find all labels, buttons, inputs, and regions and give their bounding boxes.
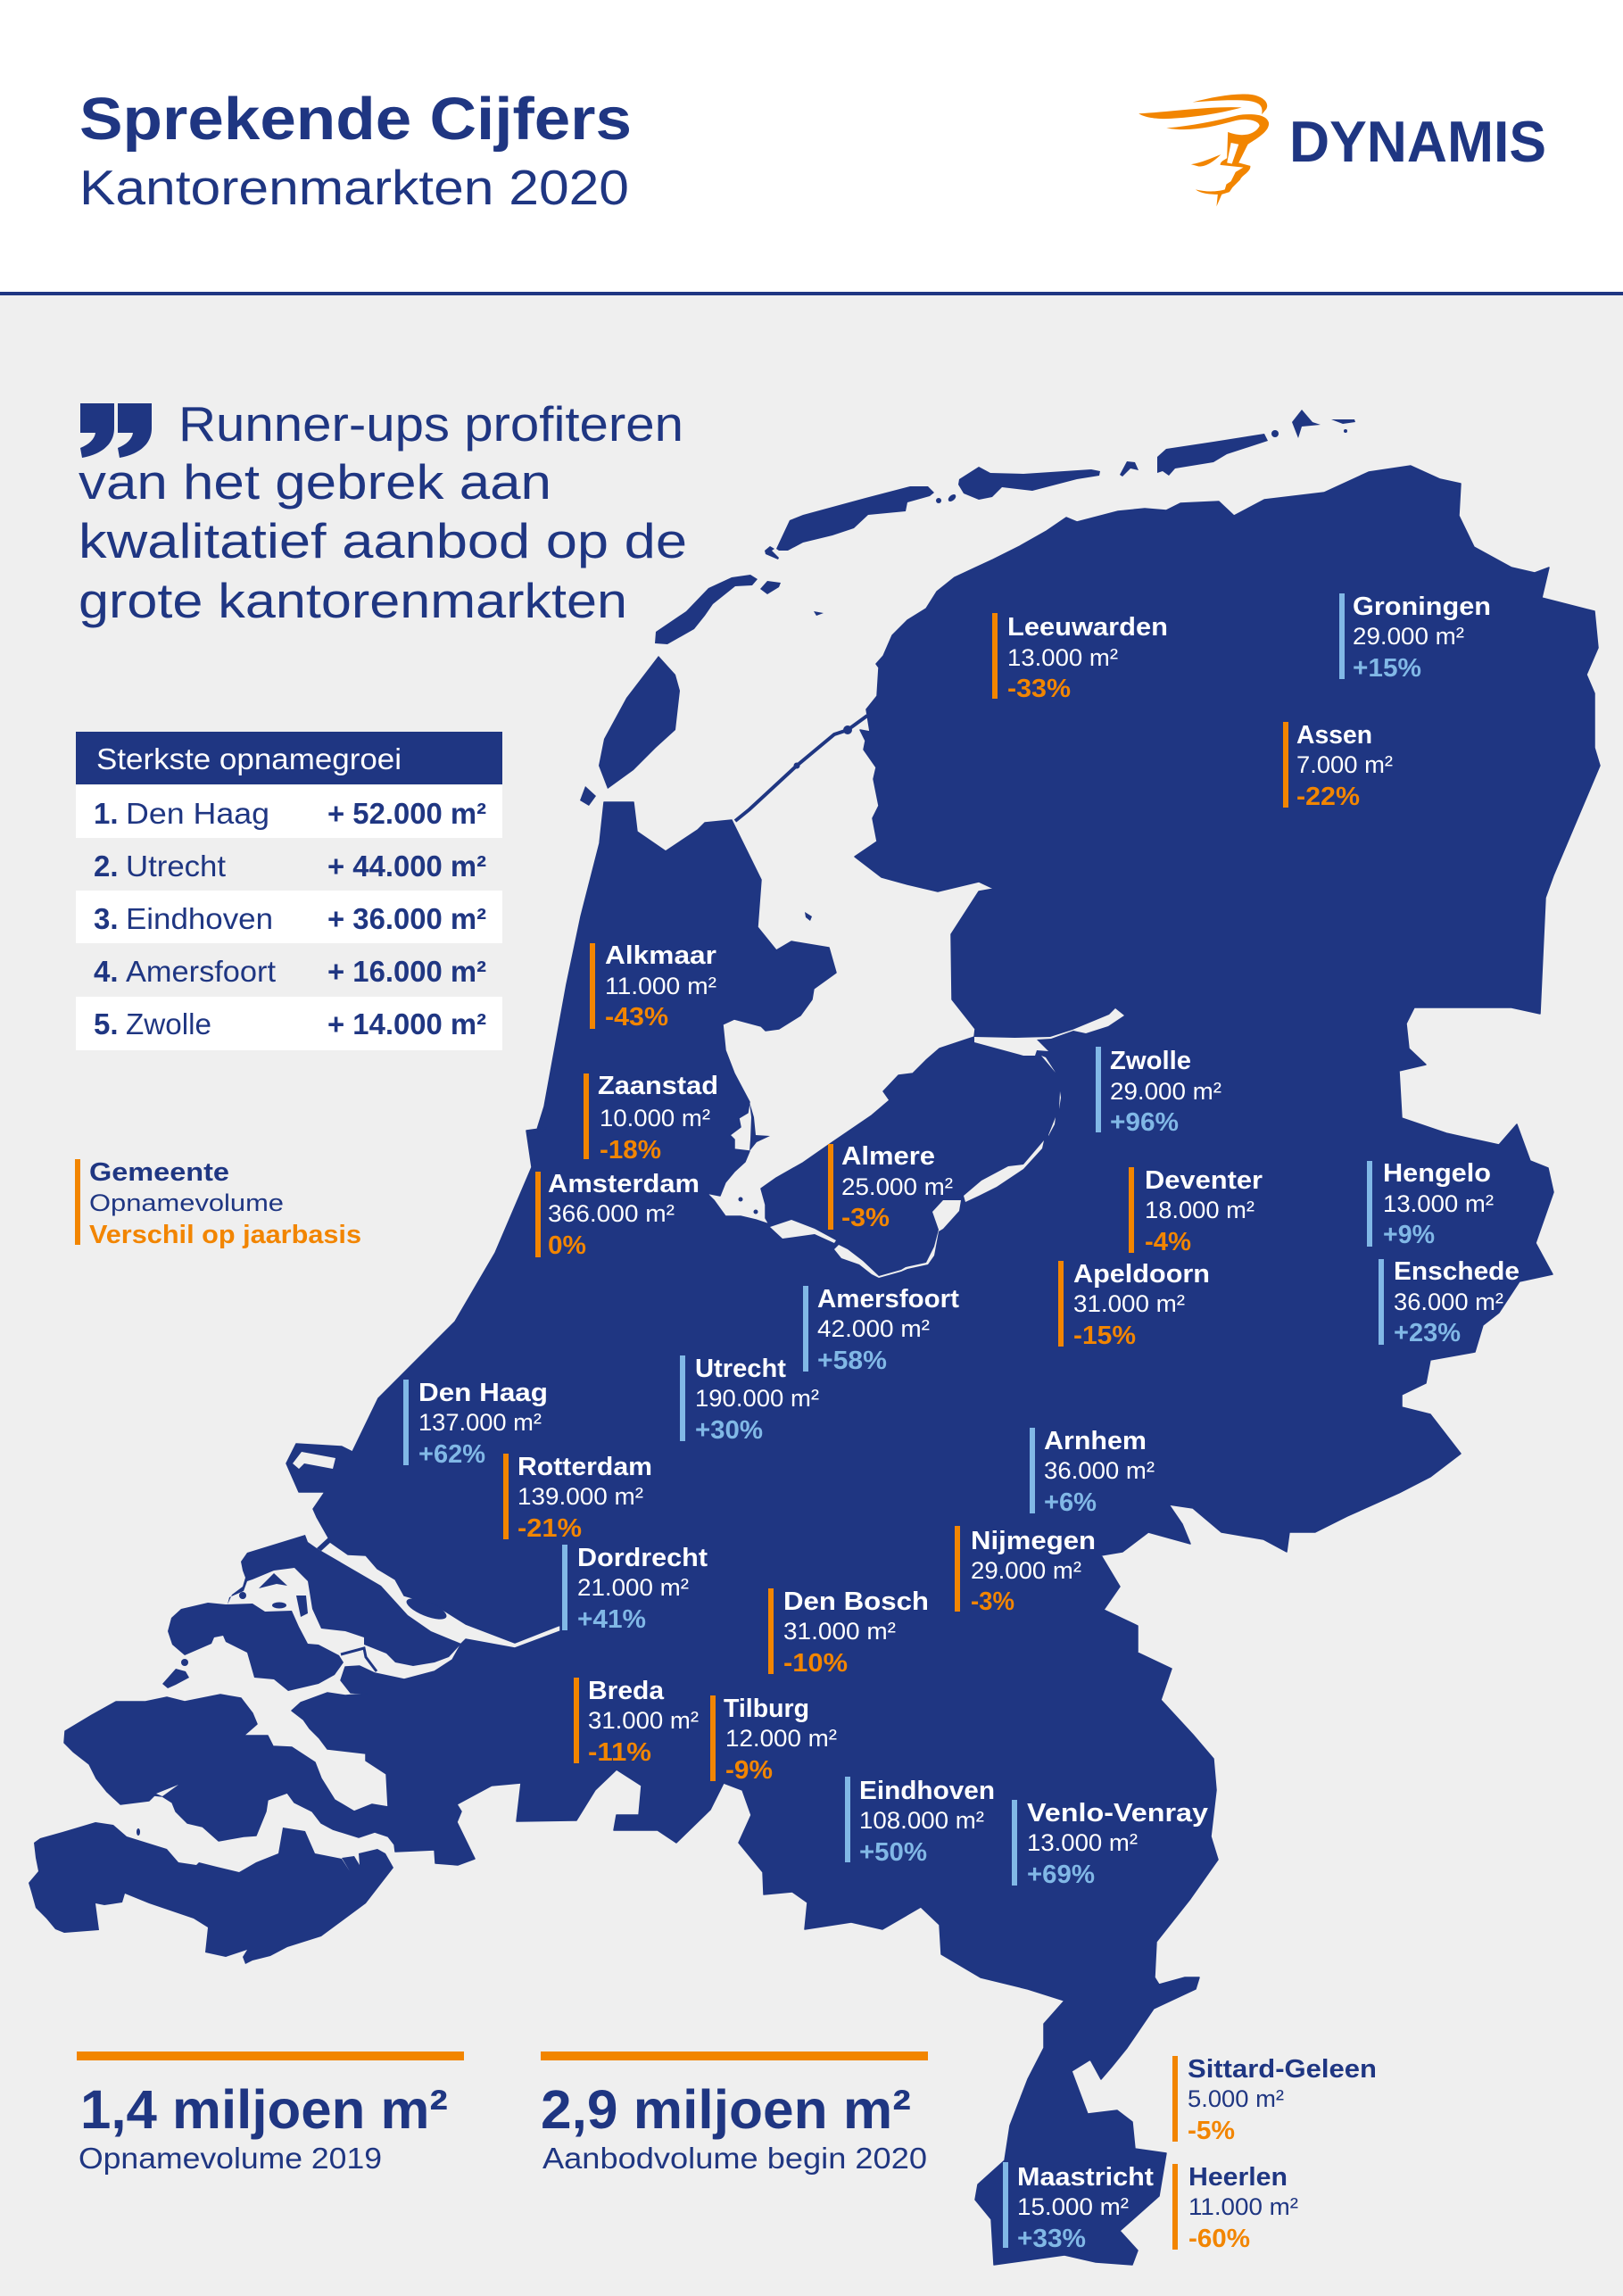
title: [79, 86, 632, 215]
label: Breda: Breda: [588, 1677, 665, 1705]
row 1: + 52.000 m²: [327, 797, 486, 830]
label: Sittard-Geleen: [1172, 2055, 1377, 2145]
label: Den Bosch: [768, 1587, 929, 1678]
label: Breda: -11%: [588, 1738, 651, 1767]
row 4: Amersfoort: [126, 955, 276, 988]
label: Den Haag: +62%: [418, 1440, 485, 1469]
row 1: Den Haag: [126, 797, 269, 830]
row 2: Utrecht: [126, 850, 226, 883]
label: Den Haag: Den Haag: [418, 1379, 548, 1407]
label: Sittard-Geleen: 5.000 m²: [1188, 2085, 1284, 2112]
label: Almere: 25.000 m²: [841, 1173, 953, 1200]
row 1: 1.: [94, 797, 119, 830]
label: Venlo-Venray: Venlo-Venray: [1027, 1799, 1208, 1828]
row 3: 3.: [94, 902, 119, 935]
label: Assen: Assen: [1296, 721, 1372, 750]
row 2: [76, 838, 502, 891]
quote text: Runner-ups profiteren: [178, 396, 683, 452]
label: Nijmegen: 29.000 m²: [971, 1557, 1081, 1584]
label: Heerlen: -60%: [1188, 2225, 1250, 2253]
label: Hengelo: Hengelo: [1383, 1159, 1491, 1188]
label: Zaanstad: -18%: [600, 1136, 661, 1165]
table: sterkste opnamegroei: [76, 732, 502, 1050]
water: inlet on Zuid-Beveland: [156, 1785, 178, 1796]
legend: [75, 1158, 361, 1249]
mainland: [64, 466, 1600, 2265]
label: Rotterdam: [503, 1453, 652, 1543]
Zuid-Holland and Zeeland islands: [29, 1535, 461, 1964]
label: Amsterdam: 0%: [548, 1231, 586, 1260]
label: Arnhem: [1030, 1427, 1155, 1517]
label: Apeldoorn: -15%: [1073, 1322, 1136, 1350]
label: Heerlen: 11.000 m²: [1188, 2193, 1298, 2220]
label: Tilburg: Tilburg: [724, 1695, 809, 1723]
label: Deventer: 18.000 m²: [1145, 1197, 1255, 1223]
stat: opnamevolume 2019: [77, 2051, 464, 2175]
row 4: 4.: [94, 955, 119, 988]
Afsluitdijk: [735, 716, 867, 821]
water: Ketelmeer: [974, 1008, 1124, 1056]
label: Heerlen: [1172, 2163, 1298, 2253]
row 2: 2.: [94, 850, 119, 883]
label: Maastricht: +33%: [1017, 2225, 1086, 2253]
water: Europoort harbour: [293, 1452, 335, 1469]
label: Venlo-Venray: [1012, 1799, 1208, 1889]
label: Nijmegen: [955, 1526, 1096, 1616]
label: Enschede: [1379, 1257, 1519, 1347]
row 5: Zwolle: [126, 1007, 211, 1040]
label: Maastricht: [1003, 2162, 1154, 2253]
label: Groningen: [1339, 593, 1491, 683]
label: Arnhem: Arnhem: [1044, 1427, 1147, 1455]
row 4: + 16.000 m²: [327, 955, 486, 988]
row 3: Eindhoven: [126, 902, 273, 935]
row 5: 5.: [94, 1007, 119, 1040]
Wadden islands: [580, 410, 1355, 921]
label: Nijmegen: Nijmegen: [971, 1527, 1096, 1555]
logo: Dynamis: [1139, 94, 1546, 206]
header band: [0, 0, 1623, 295]
label: Deventer: -4%: [1145, 1228, 1191, 1256]
quote text: van het gebrek aan: [79, 454, 551, 510]
label: Zwolle: Zwolle: [1110, 1047, 1191, 1075]
label: Tilburg: -9%: [725, 1756, 773, 1785]
label: Den Haag: 137.000 m²: [418, 1409, 542, 1436]
label: Enschede: Enschede: [1394, 1257, 1519, 1286]
icon: Dynamis head: [1139, 94, 1269, 206]
row 5: + 14.000 m²: [327, 1007, 486, 1040]
icon: quotation marks: [80, 403, 152, 458]
label: Zaanstad: [584, 1072, 718, 1165]
label: Breda: [574, 1677, 699, 1767]
label: Dordrecht: +41%: [577, 1605, 646, 1634]
label: Hengelo: 13.000 m²: [1383, 1190, 1494, 1217]
title: Sprekende Cijfers: [79, 86, 632, 153]
row 3: [76, 891, 502, 943]
legend: Opnamevolume: [89, 1189, 284, 1216]
label: Rotterdam: Rotterdam: [518, 1453, 652, 1481]
label: Amersfoort: +58%: [817, 1347, 887, 1375]
label: Dordrecht: 21.000 m²: [577, 1574, 689, 1601]
label: Alkmaar: [590, 941, 716, 1032]
water: Randmeren around Flevoland: [770, 1056, 1061, 1278]
label: Leeuwarden: Leeuwarden: [1007, 613, 1168, 642]
label: Breda: 31.000 m²: [588, 1707, 699, 1734]
label: Groningen: +15%: [1353, 654, 1421, 683]
label: Den Haag: [403, 1379, 548, 1469]
label: Arnhem: +6%: [1044, 1488, 1097, 1517]
table header: Sterkste opnamegroei: [96, 742, 402, 775]
label: Leeuwarden: 13.000 m²: [1007, 644, 1118, 671]
label: Utrecht: Utrecht: [695, 1355, 786, 1383]
stat: opnamevolume 2019: Opnamevolume 2019: [79, 2142, 382, 2175]
label: Enschede: +23%: [1394, 1319, 1461, 1347]
stat: aanbodvolume begin 2020: 2,9 miljoen m²: [541, 2079, 911, 2140]
label: Den Bosch: Den Bosch: [783, 1587, 929, 1616]
label: Utrecht: 190.000 m²: [695, 1385, 819, 1412]
label: Leeuwarden: -33%: [1007, 675, 1071, 703]
label: Assen: 7.000 m²: [1296, 751, 1393, 778]
label: Enschede: 36.000 m²: [1394, 1289, 1503, 1315]
label: Amsterdam: 366.000 m²: [548, 1200, 675, 1227]
label: Venlo-Venray: +69%: [1027, 1861, 1095, 1889]
label: Rotterdam: 139.000 m²: [518, 1483, 643, 1510]
label: Almere: -3%: [841, 1204, 890, 1232]
quote text: [79, 396, 687, 628]
label: Deventer: [1129, 1166, 1263, 1256]
stat: opnamevolume 2019: 1,4 miljoen m²: [80, 2079, 448, 2140]
label: Venlo-Venray: 13.000 m²: [1027, 1829, 1138, 1856]
label: Amersfoort: Amersfoort: [817, 1285, 959, 1314]
label: Apeldoorn: Apeldoorn: [1073, 1260, 1210, 1289]
quote text: kwalitatief aanbod op de: [79, 513, 687, 568]
label: Utrecht: [680, 1355, 819, 1445]
stat: aanbodvolume begin 2020: Aanbodvolume begin 2020: [542, 2142, 927, 2175]
quote text: grote kantorenmarkten: [79, 573, 627, 628]
label: Tilburg: [710, 1695, 837, 1785]
row 2: + 44.000 m²: [327, 850, 486, 883]
label: Maastricht: 15.000 m²: [1017, 2193, 1129, 2220]
label: Hengelo: +9%: [1383, 1221, 1435, 1249]
row 1: [76, 785, 502, 838]
label: Almere: [828, 1142, 953, 1232]
label: Assen: [1283, 721, 1393, 811]
label: Arnhem: 36.000 m²: [1044, 1457, 1155, 1484]
label: Eindhoven: 108.000 m²: [859, 1807, 984, 1834]
label: Hengelo: [1367, 1159, 1494, 1249]
label: Heerlen: Heerlen: [1188, 2163, 1288, 2192]
label: Tilburg: 12.000 m²: [725, 1725, 837, 1752]
label: Alkmaar: Alkmaar: [605, 941, 716, 970]
label: Alkmaar: 11.000 m²: [605, 973, 716, 999]
row 3: + 36.000 m²: [327, 902, 486, 935]
quote: [79, 396, 687, 628]
label: Apeldoorn: [1058, 1260, 1210, 1350]
row 4: [76, 943, 502, 997]
label: Almere: Almere: [841, 1142, 935, 1171]
table header: [76, 732, 502, 784]
label: Zwolle: +96%: [1110, 1108, 1179, 1137]
label: Dordrecht: [562, 1544, 708, 1634]
label: Utrecht: +30%: [695, 1416, 763, 1445]
title: Kantorenmarkten 2020: [79, 160, 629, 215]
Waterland spit near Marken: [749, 1102, 770, 1151]
stat: aanbodvolume begin 2020: [541, 2051, 928, 2175]
label: Zwolle: 29.000 m²: [1110, 1078, 1221, 1105]
row 5: [76, 997, 502, 1050]
label: Zaanstad: 10.000 m²: [600, 1105, 710, 1131]
legend: Gemeente: [89, 1158, 229, 1187]
label: Groningen: 29.000 m²: [1353, 623, 1464, 650]
label: Groningen: Groningen: [1353, 593, 1491, 621]
label: Apeldoorn: 31.000 m²: [1073, 1290, 1185, 1317]
label: Zaanstad: Zaanstad: [598, 1072, 718, 1100]
label: Den Bosch: 31.000 m²: [783, 1618, 896, 1645]
label: Deventer: Deventer: [1145, 1166, 1263, 1195]
label: Sittard-Geleen: Sittard-Geleen: [1188, 2055, 1377, 2084]
label: Rotterdam: -21%: [518, 1514, 582, 1543]
label: Eindhoven: +50%: [859, 1838, 927, 1867]
label: Nijmegen: -3%: [971, 1587, 1014, 1616]
IJmeer islets: [739, 1198, 758, 1214]
label: Sittard-Geleen: -5%: [1188, 2117, 1235, 2145]
label: Amersfoort: [803, 1285, 959, 1375]
label: Assen: -22%: [1296, 783, 1360, 811]
label: Eindhoven: [845, 1777, 995, 1867]
label: Eindhoven: Eindhoven: [859, 1777, 995, 1805]
label: Amsterdam: [535, 1170, 700, 1260]
map of the Netherlands: [29, 410, 1600, 2265]
label: Maastricht: Maastricht: [1017, 2163, 1154, 2192]
label: Amsterdam: Amsterdam: [548, 1170, 700, 1198]
logo wordmark: DYNAMIS: [1289, 109, 1546, 174]
legend: Verschil op jaarbasis: [89, 1221, 361, 1249]
label: Leeuwarden: [992, 613, 1168, 703]
label: Amersfoort: 42.000 m²: [817, 1315, 930, 1342]
label: Zwolle: [1096, 1047, 1221, 1137]
label: Dordrecht: Dordrecht: [577, 1544, 708, 1572]
label: Alkmaar: -43%: [605, 1003, 668, 1032]
label: Den Bosch: -10%: [783, 1649, 848, 1678]
